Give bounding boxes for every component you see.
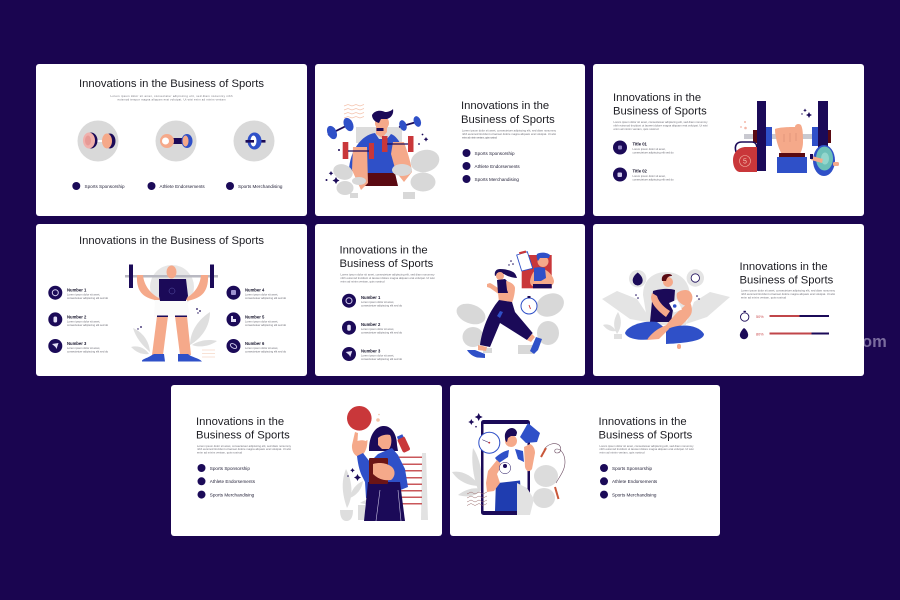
heading: Innovations in the	[740, 261, 828, 273]
stopwatch	[479, 432, 500, 453]
list: labels: Sports Sponsorship	[84, 184, 125, 189]
heading	[196, 416, 290, 442]
description: enim ad minim veniam, quis nostrud	[741, 296, 786, 300]
item: number 1: Lorem ipsum dolor sit amet,	[67, 292, 100, 296]
heading: Business of Sports	[613, 106, 707, 118]
description	[340, 272, 435, 284]
trainer card	[522, 255, 552, 288]
description: euismod tempor magna aliquam erat volutpat. Ut wisi enim ad minim veniam	[118, 98, 226, 102]
icons	[633, 272, 643, 286]
description: enim ad minim veniam, quis nostrud	[462, 136, 498, 140]
barbell	[125, 275, 218, 278]
bench	[360, 173, 398, 186]
fist	[775, 124, 803, 154]
item: number 1: Number 1	[361, 295, 381, 300]
item: title 02: Title 02	[632, 168, 648, 174]
description: nibh euismod tincidunt ut laoreet dolore magna aliquam erat volutpat. Ut wisi	[462, 132, 556, 136]
book and hand	[369, 458, 388, 484]
clipboard	[517, 252, 533, 271]
description	[614, 120, 708, 131]
heading: Innovations in the	[598, 416, 687, 428]
illustration: runner and trainer	[454, 250, 568, 358]
description: nibh euismod tincidunt ut laoreet dolore magna aliquam erat volutpat. Ut wisi	[600, 447, 694, 451]
item: number 4: consectetuer adipiscing elit sed do	[245, 296, 287, 300]
ladder	[421, 453, 428, 520]
panel: slide 4, weightlifter with six items	[36, 224, 307, 376]
illustration: barbell rack	[733, 101, 839, 176]
item: number 1	[48, 286, 109, 300]
illustration: weightlifter	[125, 264, 218, 362]
item: number 6: Lorem ipsum dolor sit amet,	[245, 346, 278, 350]
description: Lorem ipsum dolor sit amet, consectetuer adipiscing elit, sed diam nonummy	[600, 444, 694, 448]
description	[462, 128, 557, 140]
phone	[481, 420, 530, 515]
heading: Business of Sports	[340, 258, 434, 270]
blue dumbbells	[328, 121, 420, 135]
zigzag	[467, 492, 487, 506]
icon: dumbbell pink	[78, 120, 118, 162]
sparkles	[137, 308, 201, 330]
zigzag	[344, 104, 364, 118]
list: Sports Sponsorship	[612, 466, 653, 471]
description: Lorem ipsum dolor sit amet, consectetuer adipiscing elit, sed diam nonummy	[340, 272, 435, 276]
item: number 3	[342, 347, 403, 361]
trousers	[364, 482, 405, 521]
shirt	[496, 449, 524, 483]
heading: Business of Sports	[598, 430, 693, 442]
item: number 3	[48, 339, 109, 354]
item: number 4: Number 4	[245, 288, 265, 292]
football	[499, 462, 511, 474]
item: number 5	[226, 312, 287, 327]
item: number 1	[342, 294, 403, 308]
item: number 1: consectetuer adipiscing elit sed do	[67, 296, 109, 300]
plant	[603, 312, 622, 339]
item: number 1: Number 1	[67, 288, 87, 292]
head	[505, 435, 517, 447]
heading: Innovations in the Business of Sports	[79, 78, 264, 90]
description: enim ad minim veniam, quis nostrud	[600, 450, 645, 454]
heading	[461, 100, 555, 126]
panel: slide 6, seated athlete with progress bars	[593, 224, 864, 376]
arms	[137, 275, 160, 301]
torso and jacket	[357, 448, 408, 498]
description: enim ad minim veniam, quis nostrud	[614, 127, 659, 131]
list: Athlete Endorsements	[612, 479, 658, 484]
list: labels	[72, 182, 283, 190]
list: Sports Merchandising	[210, 492, 255, 497]
item: number 6: Number 6	[245, 341, 265, 346]
description: nibh euismod tincidunt ut laoreet dolore magna aliquam erat volutpat. Ut wisi	[741, 292, 835, 296]
list: Sports Merchandising	[612, 492, 657, 497]
hair	[369, 426, 398, 451]
sleeve	[779, 153, 805, 157]
item: title 01: Lorem ipsum dolor sit amet,	[632, 147, 666, 151]
heading	[740, 261, 834, 286]
backdrop	[602, 269, 730, 325]
item: number 4: Lorem ipsum dolor sit amet,	[245, 292, 278, 296]
description: enim ad minim veniam, quis nostrud	[197, 450, 242, 454]
panel: slide 8, phone with footballer	[450, 385, 720, 536]
panel: slide 7, girl spinning ball	[171, 385, 442, 536]
panel: slide 5, runner	[315, 224, 585, 376]
jump rope	[544, 444, 565, 483]
item: number 2	[342, 321, 403, 335]
item: number 2: consectetuer adipiscing elit sed do	[361, 330, 403, 334]
leaves	[452, 448, 558, 508]
progress: timer 50%: 50%	[756, 315, 764, 319]
progress: pear 80%: 80%	[756, 332, 764, 336]
arms	[352, 147, 368, 190]
description	[110, 94, 233, 102]
list: Athlete Endorsements	[210, 479, 256, 484]
item: number 6: consectetuer adipiscing elit sed do	[245, 350, 287, 354]
illustration: lifter	[325, 104, 442, 199]
panel: slide 1, three dumbbell icons	[36, 64, 307, 216]
heading	[340, 244, 434, 270]
sparkles	[801, 108, 812, 118]
heading	[598, 416, 693, 442]
backrest	[356, 127, 402, 143]
item: number 1: Lorem ipsum dolor sit amet,	[361, 300, 394, 304]
panel: slide 3, fist and barbell	[593, 64, 864, 216]
arm left	[486, 460, 502, 492]
list: Sports Sponsorship	[474, 151, 515, 156]
red dumbbells	[343, 136, 414, 159]
item: title 02: Lorem ipsum dolor sit amet,	[632, 174, 666, 178]
item: number 4	[226, 286, 287, 300]
shorts	[154, 300, 190, 317]
icon: dumbbell blue	[156, 120, 196, 162]
description	[600, 444, 694, 454]
description: enim ad minim veniam, quis nostrud	[340, 280, 385, 284]
list: Sports Sponsorship	[210, 466, 250, 471]
item: number 3: consectetuer adipiscing elit sed do	[67, 350, 109, 354]
progress: timer 50%	[740, 311, 829, 321]
description: Lorem ipsum dolor sit amet, consectetuer adipiscing elit, sed diam nonummy	[614, 120, 708, 124]
description	[197, 444, 292, 454]
item: title 01	[613, 140, 674, 154]
torso	[159, 279, 188, 301]
item: number 1: consectetuer adipiscing elit sed do	[361, 304, 403, 308]
watermark fragment: om	[862, 333, 887, 351]
list: labels: Athlete Endorsements	[160, 184, 205, 189]
heading: Innovations in the Business of Sports	[79, 235, 264, 247]
body	[650, 289, 675, 322]
item: number 3: Number 3	[361, 348, 381, 354]
heading: Innovations in the	[461, 100, 549, 112]
item: number 5: Number 5	[245, 314, 265, 320]
description: Lorem ipsum dolor sit amet, consectetuer adipiscing elit, sed diam nonummy	[741, 288, 836, 292]
description: nibh euismod tincidunt ut laoreet dolore magna aliquam erat volutpat. Ut wisi	[614, 124, 708, 128]
head	[166, 266, 176, 278]
sparkles	[326, 134, 428, 184]
description: nibh euismod tincidunt ut laoreet dolore magna aliquam erat volutpat. Ut wisi	[340, 276, 435, 280]
icon: wheel	[234, 120, 274, 162]
illustration: seated athlete	[602, 269, 730, 349]
illustration: phone and footballer	[452, 413, 565, 515]
kettlebell handle	[735, 142, 757, 152]
plate and hand	[813, 145, 835, 176]
item: title 01: Title 01	[632, 142, 648, 146]
list: labels: Sports Merchandising	[238, 184, 283, 189]
list	[198, 464, 256, 499]
item: number 3: consectetuer adipiscing elit sed do	[361, 357, 403, 361]
description	[741, 288, 836, 300]
illustration: girl with ball	[340, 406, 428, 521]
shorts	[495, 480, 522, 511]
description: Lorem ipsum dolor sit amet, consectetur adipiscing elit, sed diam nonummy nibh	[110, 94, 233, 98]
item: number 3: Lorem ipsum dolor sit amet,	[67, 346, 100, 350]
item: number 2: Number 2	[67, 314, 87, 320]
heading: Innovations in the	[613, 92, 701, 104]
item: number 6	[226, 339, 287, 354]
heading: Innovations in the	[196, 416, 284, 428]
item: number 5: consectetuer adipiscing elit sed do	[245, 323, 287, 327]
description: nibh euismod tincidunt ut laoreet dolore magna aliquam erat volutpat. Ut wisi	[197, 447, 291, 451]
leaf over phone	[517, 483, 534, 515]
legs	[152, 316, 168, 355]
shirt	[349, 133, 408, 173]
item: number 2	[48, 312, 109, 327]
heading: Business of Sports	[196, 430, 290, 442]
sparkles	[347, 468, 361, 481]
head and hair	[376, 124, 387, 138]
panel: slide 2, man lifting dumbbells	[315, 64, 585, 216]
item: number 2: consectetuer adipiscing elit sed do	[67, 323, 109, 327]
bottle	[396, 434, 411, 453]
item: title 02	[613, 168, 674, 182]
shoes	[142, 354, 165, 362]
wristband	[669, 300, 682, 312]
item: title 01: consectetuer adipiscing elit sed do	[632, 150, 674, 154]
forearm	[524, 444, 535, 471]
item: title 02: consectetuer adipiscing elit sed do	[632, 178, 674, 182]
plant	[340, 469, 378, 521]
heading: Business of Sports	[461, 114, 555, 126]
kettlebell	[733, 147, 757, 172]
list: Athlete Endorsements	[474, 164, 520, 169]
hand	[352, 432, 368, 457]
description: Lorem ipsum dolor sit amet, consectetuer adipiscing elit, sed diam nonummy	[462, 128, 557, 132]
heading: Business of Sports	[740, 274, 834, 286]
description: Lorem ipsum dolor sit amet, consectetuer adipiscing elit, sed diam nonummy	[197, 444, 292, 448]
runner	[495, 269, 517, 278]
progress: pear 80%	[740, 328, 829, 339]
item: number 5: Lorem ipsum dolor sit amet,	[245, 320, 278, 324]
legs	[625, 322, 665, 340]
heading: Innovations in the	[340, 244, 428, 256]
ball	[347, 406, 372, 431]
leaves	[454, 289, 568, 354]
heading	[613, 92, 707, 118]
item: number 3: Lorem ipsum dolor sit amet,	[361, 354, 394, 358]
sparkles	[468, 413, 483, 428]
stopwatch	[521, 298, 537, 314]
leaves	[331, 147, 442, 199]
item: number 2: Lorem ipsum dolor sit amet,	[67, 320, 100, 324]
illustration: barbell rack: 5	[743, 158, 747, 166]
megaphone	[520, 423, 540, 443]
item: number 2: Lorem ipsum dolor sit amet,	[361, 327, 394, 331]
item: number 3: Number 3	[67, 341, 87, 346]
list: Sports Merchandising	[474, 177, 519, 182]
list	[462, 149, 520, 183]
item: number 2: Number 2	[361, 322, 381, 327]
list	[600, 464, 658, 499]
